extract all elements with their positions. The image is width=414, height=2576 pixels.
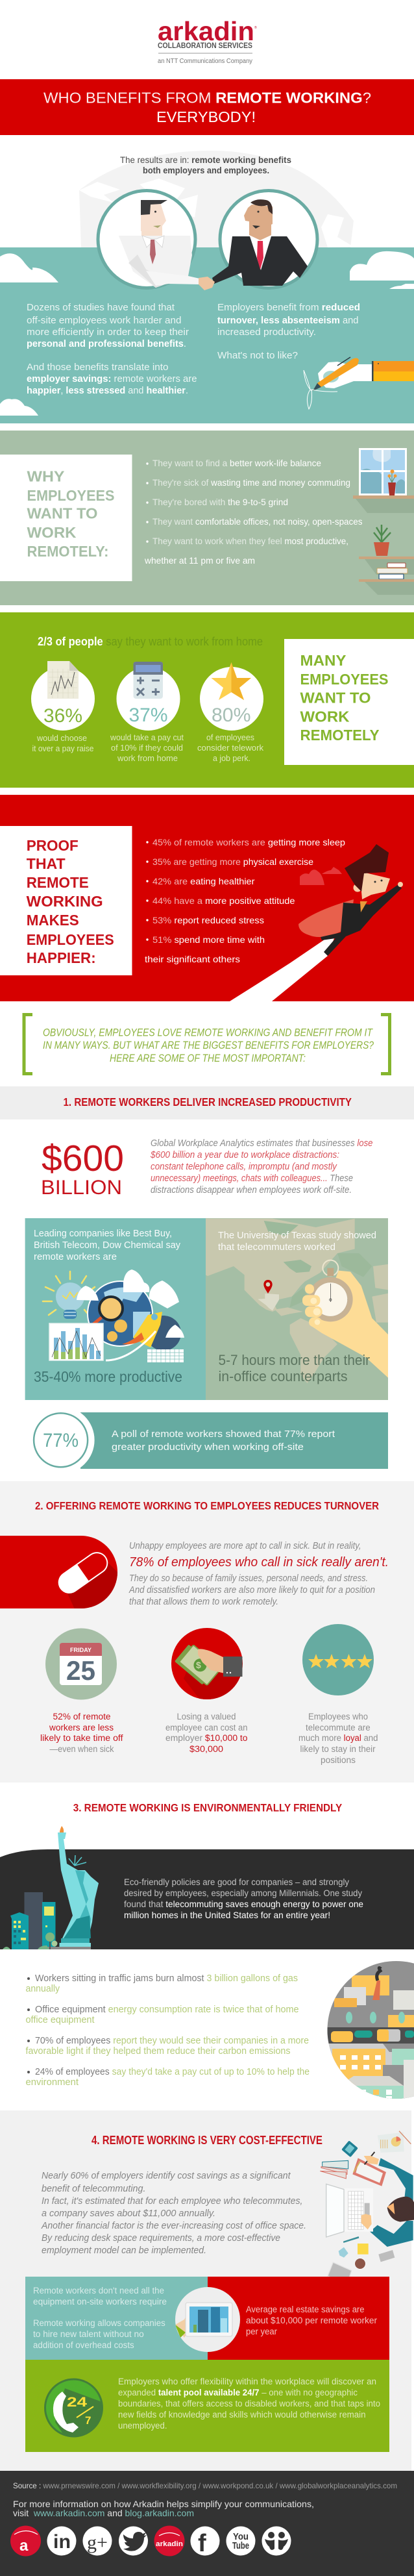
illustration: desk from above (320, 2131, 414, 2284)
logo: arkadin (158, 16, 257, 65)
more information: For more information on how Arkadin helps simplify your communications, (13, 2499, 314, 2509)
icon: clouds (0, 251, 414, 416)
bullet list (144, 458, 362, 566)
callout: 77 percent poll: 77% (43, 1430, 79, 1451)
social icons (10, 2526, 291, 2557)
icon: facebook (191, 2526, 219, 2557)
text: unhappy employees: They do so because of family issues, personal needs, and stress. (129, 1573, 368, 1584)
intro text: The results are in: remote working benefits (120, 155, 291, 165)
panel: University of Texas study (206, 1218, 394, 1400)
stat: 37 percent: 37% (128, 705, 167, 726)
text: unhappy employees: 78% of employees who call in sick really aren't. (129, 1555, 389, 1569)
callout: 77 percent poll: A poll of remote workers showed that 77% report (112, 1429, 335, 1440)
bullet list: their significant others (145, 954, 240, 964)
stat: cost of losing employee: employee can cost an (165, 1723, 248, 1732)
text: workplace distractions: constant telephone calls, impromptu (and mostly (151, 1162, 337, 1172)
intro text: both employers and employees. (143, 166, 269, 175)
heading box: REMOTE (27, 874, 89, 891)
heading box: WORK (300, 708, 350, 725)
text: right column: increased productivity. (217, 327, 316, 338)
text: cost savings: Another financial factor is the ever-increasing cost of office space. (41, 2220, 306, 2231)
stat: 37 percent: would take a pay cut (110, 733, 184, 742)
bullet list: 53% report reduced stress (152, 915, 264, 925)
panel: reduces turnover (0, 1481, 414, 1782)
title banner: EVERYBODY! (156, 108, 256, 125)
icon: youtube (226, 2526, 256, 2556)
panel: University of Texas study: 5-7 hours more than their (218, 1352, 370, 1368)
text: eco-friendly policies: million homes in the United States for an entire year! (124, 1910, 330, 1920)
text: eco-friendly policies: desired by employees, especially among Millennials. One study (124, 1888, 362, 1898)
bullet list: environmental facts: favorable light if they helped them reduce their carbon emissions (26, 2046, 291, 2057)
stat: less time off: —even when sick (49, 1744, 114, 1754)
panel: more productive: Leading companies like Best Buy, (34, 1228, 172, 1239)
panel: more productive: remote workers are (34, 1251, 117, 1262)
text: right column: What's not to like? (217, 350, 298, 361)
bullet list: environmental facts: Workers sitting in traffic jams burn almost 3 billion gallons of gas (35, 1973, 298, 1984)
heading box: WANT TO (27, 505, 97, 522)
panel: talent pool: Employers who offer flexibility within the workplace will discover an (118, 2377, 376, 2386)
panel: University of Texas study: in-office counterparts (218, 1368, 348, 1384)
text: eco-friendly policies (124, 1877, 363, 1920)
panel: more productive (25, 1218, 206, 1400)
text: cost savings: a company saves about $11,000 annually. (42, 2208, 215, 2219)
logo: arkadin: arkadin (158, 16, 254, 46)
icon: hand signing with pen (304, 357, 414, 409)
stat: loyalty (298, 1624, 378, 1765)
section heading: 2. OFFERING REMOTE WORKING TO EMPLOYEES REDUCES TURNOVER (35, 1500, 379, 1512)
icon: plant and books on shelves (359, 525, 414, 595)
icon: window with flowers (353, 448, 414, 513)
heading box (0, 826, 132, 975)
text: left column: more efficiently in order to keep their (27, 327, 189, 338)
stat: 80 percent: 80% (212, 705, 250, 726)
bullet list: environmental facts: environment (26, 2077, 79, 2088)
section heading: productivity: 1. REMOTE WORKERS DELIVER INCREASED PRODUCTIVITY (64, 1095, 352, 1108)
employee in circle (98, 191, 202, 288)
bullet list: environmental facts: office equipment (26, 2015, 95, 2025)
bullet list: They want to work when they feel most productive, (152, 536, 348, 546)
stat: 37 percent: of 10% if they could (111, 744, 183, 753)
panel: proof that remote working makes employees happier (0, 795, 414, 1001)
title banner: WHO BENEFITS FROM REMOTE WORKING? (43, 90, 371, 106)
panel: talent pool: new fields of knowledge and skills which would otherwise remain (118, 2410, 366, 2420)
footer (0, 2471, 414, 2576)
heading box: WHY (27, 468, 65, 484)
text: cost savings: employment model can be implemented. (42, 2245, 206, 2256)
icon: arkadin a: a (19, 2537, 29, 2555)
stat: cost of losing employee: Losing a valued (177, 1712, 236, 1721)
section heading: environmentally friendly: 3. REMOTE WORKING IS ENVIRONMENTALLY FRIENDLY (73, 1801, 343, 1814)
heading box (284, 639, 414, 765)
bullet list: 45% of remote workers are getting more sleep (152, 837, 345, 847)
more information (13, 2499, 314, 2518)
icon: google plus: g+ (87, 2532, 108, 2553)
heading box: THAT (27, 855, 66, 872)
heading box: WANT TO (300, 690, 371, 707)
bullet list: whether at 11 pm or five am (144, 555, 255, 566)
text: right column: turnover, less absenteeism and (217, 315, 358, 326)
panel: equipment: equipment on-site workers require (33, 2297, 167, 2307)
handshake characters (98, 191, 317, 290)
title banner (0, 79, 414, 135)
bullet list: environmental facts: 24% of employees say they'd take a pay cut of up to 10% to help the (35, 2067, 310, 2077)
intro text (120, 155, 291, 175)
icon: youtube: You (233, 2531, 249, 2542)
bullet list: They're bored with the 9-to-5 grind (152, 497, 288, 507)
icon: pill (0, 1536, 117, 1608)
text: left column: Dozens of studies have found that (27, 302, 175, 313)
more information: visit www.arkadin.com and blog.arkadin.com (13, 2508, 194, 2518)
text: left column: employer savings: remote workers are (27, 373, 197, 384)
panel: why employees want to work remotely (0, 431, 414, 605)
panel: real estate savings (208, 2277, 389, 2360)
bullet list: environmental facts: Office equipment energy consumption rate is twice that of home (35, 2005, 298, 2015)
stat: 80 percent: a job perk. (213, 754, 250, 763)
panel: talent pool (25, 2360, 389, 2452)
bullet list: 51% spend more time with (152, 934, 265, 945)
icon: 24/7 phone: 24 (67, 2395, 87, 2410)
stat: cost of losing employee: employer $10,000 to (165, 1733, 248, 1743)
icon: tablet with city (175, 2287, 240, 2352)
illustration: map and stopwatch (206, 1219, 394, 1383)
statistic: 600 billion: $600 (42, 1138, 124, 1179)
stat: 37 percent: work from home (117, 754, 178, 763)
stat: 36 percent: 36% (43, 705, 82, 727)
text: left column: And those benefits translate into (27, 362, 169, 373)
text: workplace distractions: unnecessary) meetings, chats with colleagues... These (151, 1173, 353, 1184)
stat: less time off: 25 (66, 1655, 95, 1686)
heading box: EMPLOYEES (27, 931, 114, 948)
icon: slideshare (262, 2526, 291, 2556)
headline statistic: 2/3 of people say they want to work from home (38, 635, 263, 648)
panel: talent pool: boundaries, that offers access to disabled workers, and that taps into (118, 2399, 380, 2408)
text: left column: personal and professional benefits. (27, 338, 186, 349)
stat: 80 percent: consider telework (197, 744, 264, 753)
icon: arkadin a (10, 2526, 41, 2556)
text: eco-friendly policies: found that telecommuting saves enough energy to power one (124, 1899, 363, 1909)
logo: arkadin: COLLABORATION SERVICES (158, 42, 252, 50)
stat: 80 percent (197, 662, 264, 763)
illustration: statue and city (3, 1826, 99, 1949)
panel: real estate savings: Average real estate savings are (246, 2305, 365, 2314)
icon: 24/7 phone: 7 (85, 2414, 91, 2427)
heading box (0, 455, 132, 581)
stat: cost of losing employee (165, 1628, 248, 1754)
stat: loyalty: telecommute are (306, 1723, 371, 1732)
text: left column: off-site employees work harder and (27, 315, 182, 326)
text: left column (27, 302, 197, 396)
panel: real estate savings: about $10,000 per remote worker (246, 2316, 378, 2325)
icon: linkedin (47, 2526, 77, 2556)
stat: loyalty: likely to stay in their (300, 1744, 376, 1754)
heading box: WORK (27, 524, 77, 541)
statistic: 600 billion: BILLION (41, 1175, 122, 1199)
bullet list: 42% are eating healthier (152, 876, 255, 886)
panel: talent pool: unemployed. (118, 2421, 167, 2431)
panel: equipment: addition of overhead costs (33, 2340, 134, 2350)
icon: facebook: f (198, 2530, 206, 2557)
stat: less time off: 52% of remote (53, 1712, 110, 1721)
text: workplace distractions: Global Workplace Analytics estimates that businesses lose (151, 1138, 372, 1149)
bullet list: 35% are getting more physical exercise (152, 857, 313, 867)
text: cost savings: benefit of telecommuting. (42, 2183, 145, 2194)
text: unhappy employees (128, 1541, 389, 1607)
heading box: PROOF (27, 837, 79, 854)
icon: google plus (83, 2526, 112, 2556)
illustration: city in circle (324, 1961, 414, 2105)
stat: less time off: FRIDAY (70, 1647, 92, 1654)
heading box: HAPPIER: (27, 949, 96, 966)
panel: University of Texas study: that telecommuters worked (218, 1242, 335, 1253)
panel: real estate savings: per year (246, 2327, 277, 2336)
illustration: idea, globe and rocket (43, 1269, 184, 1362)
text: right column: Employers benefit from reduced (217, 302, 360, 313)
icon: youtube: Tube (232, 2540, 249, 2551)
text: cost savings: In fact, it's estimated that for each employee who telecommutes, (42, 2195, 302, 2207)
callout: bracketed statement: HERE ARE SOME OF THE MOST IMPORTANT: (110, 1053, 306, 1064)
bullet list: They're sick of wasting time and money commuting (152, 477, 350, 488)
icon: arkadin logo: arkadin (156, 2540, 183, 2548)
section heading: 4. REMOTE WORKING IS VERY COST-EFFECTIVE (91, 2134, 323, 2147)
stat: 36 percent (31, 661, 95, 753)
logo: arkadin: ® (254, 25, 257, 30)
panel: more productive: British Telecom, Dow Chemical say (34, 1240, 180, 1251)
text: cost savings (41, 2170, 306, 2256)
icon: twitter (119, 2526, 148, 2556)
heading box: REMOTELY (300, 727, 380, 744)
text: workplace distractions: $600 billion a year due to workplace distractions: (150, 1150, 339, 1160)
panel: equipment: Remote workers don't need all the (33, 2286, 164, 2295)
text: right column (217, 302, 360, 361)
panel: cost-effective (0, 2110, 414, 2471)
bullet list: They want to find a better work-life balance (152, 458, 321, 468)
stat: less time off (40, 1629, 123, 1754)
logo: arkadin: an NTT Communications Company (158, 58, 252, 65)
text: cost savings: By reducing desk space requirements, a more cost-effective (42, 2232, 280, 2244)
bullet list: They want comfortable offices, not noisy, open-spaces (152, 516, 362, 527)
icon: handshake (199, 277, 215, 290)
panel: many employees want to work remotely (0, 612, 414, 788)
stat: loyalty: positions (321, 1755, 356, 1765)
heading box: EMPLOYEES (27, 487, 114, 504)
stat: 80 percent: of employees (206, 733, 254, 742)
text: unhappy employees: that that allows them to work remotely. (129, 1597, 278, 1607)
panel: teal introduction (0, 191, 414, 423)
statistic: 600 billion (41, 1138, 124, 1199)
heading box: MAKES (27, 912, 79, 929)
callout: 77 percent poll: greater productivity when working off-site (112, 1442, 304, 1453)
heading box: EMPLOYEES (300, 671, 388, 688)
text: workplace distractions: distractions disappear when employees work off-site. (151, 1185, 352, 1195)
stat: loyalty: Employees who (308, 1712, 368, 1721)
stat: 37 percent (110, 662, 184, 763)
bullet list: environmental facts: annually (26, 1984, 60, 1994)
icon: arkadin logo (154, 2526, 184, 2556)
panel: more productive: 35-40% more productive (34, 1368, 182, 1385)
icon: linkedin: in (53, 2531, 71, 2553)
icon: flying superhero (230, 844, 403, 1001)
sources: Source : www.prnewswire.com / www.workflexibility.org / www.workpond.co.uk / www.globalworkplaceanalytics.com (13, 2481, 397, 2490)
stat: 36 percent: it over a pay raise (32, 744, 94, 753)
bullet list (145, 837, 345, 964)
text: workplace distractions (150, 1138, 372, 1195)
heading box: WORKING (27, 893, 103, 910)
stat: cost of losing employee: $ (196, 1660, 201, 1670)
panel: equipment: Remote working allows companies (33, 2318, 165, 2328)
panel: equipment: to hire new talent without no (33, 2329, 144, 2339)
stat: loyalty: much more loyal and (298, 1733, 378, 1743)
panel: University of Texas study: The University of Texas study showed (218, 1230, 376, 1241)
text: left column: happier, less stressed and healthier. (27, 385, 188, 396)
section heading: productivity (0, 1086, 414, 1119)
heading box: MANY (300, 652, 347, 669)
callout: bracketed statement (24, 1014, 389, 1074)
panel: equipment (25, 2277, 208, 2360)
callout: 77 percent poll (27, 1407, 388, 1474)
stat: less time off: likely to take time off (40, 1733, 123, 1743)
bullet list: 44% have a more positive attitude (152, 895, 295, 906)
bullet list: environmental facts (26, 1973, 310, 2088)
icon: 24/7 phone (45, 2379, 104, 2442)
stat: 36 percent: would choose (36, 734, 87, 743)
text: unhappy employees: Unhappy employees are more apt to call in sick. But in reality, (129, 1541, 361, 1551)
bullet list: environmental facts: 70% of employees report they would see their companies in a more (35, 2036, 309, 2046)
panel: talent pool: expanded talent pool available 24/7 – one with no geographic (118, 2388, 358, 2397)
heading box: REMOTELY: (27, 543, 109, 560)
stat: less time off: workers are less (49, 1723, 114, 1732)
text: cost savings: Nearly 60% of employers identify cost savings as a significant (42, 2170, 291, 2181)
stat: cost of losing employee: $30,000 (189, 1744, 223, 1754)
panel: eco-friendly dark band (0, 1826, 414, 1949)
text: unhappy employees: And dissatisfied workers are also more likely to quit for a position (128, 1585, 375, 1595)
employer in circle (212, 191, 317, 288)
background globe (79, 151, 354, 247)
text: eco-friendly policies: Eco-friendly policies are good for companies – and strongly (124, 1877, 349, 1887)
